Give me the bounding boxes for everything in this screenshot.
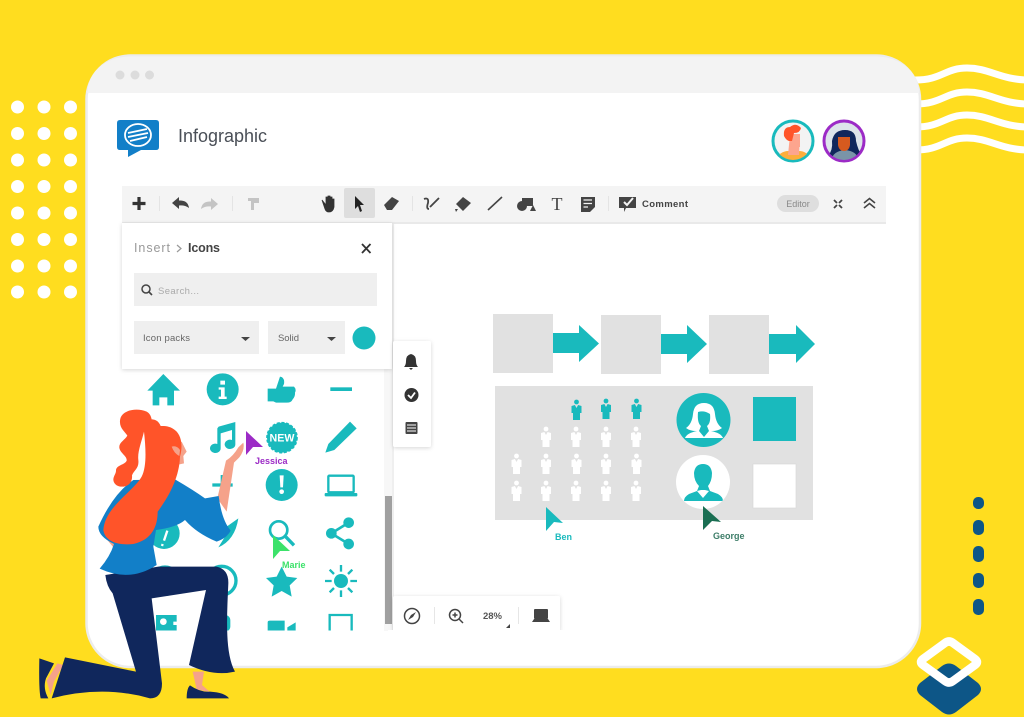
icon: eraser xyxy=(384,197,399,210)
flow boxes xyxy=(493,314,769,374)
icon: line xyxy=(488,197,502,210)
icon: contact xyxy=(156,615,177,632)
cursor: Jessica xyxy=(246,431,289,466)
icon: search xyxy=(270,521,294,545)
ear xyxy=(172,446,180,456)
window title bar xyxy=(88,56,919,93)
white pictogram rows xyxy=(512,427,642,501)
icon: hidden round xyxy=(227,615,230,630)
dropdown: solid xyxy=(268,321,345,354)
icon: home xyxy=(147,374,180,405)
document title: Infographic xyxy=(178,126,267,146)
toolbar xyxy=(122,186,886,224)
icon: undo xyxy=(172,197,189,209)
floating side toolbar xyxy=(393,341,431,447)
icon: bell xyxy=(404,354,418,370)
icon: fill marker xyxy=(455,197,471,212)
icon: zoom xyxy=(450,610,463,623)
logo icon xyxy=(117,120,159,157)
character: kneeling woman xyxy=(39,410,244,698)
teal pictogram row xyxy=(572,399,642,420)
icon: hidden circle left xyxy=(158,565,172,596)
icon: check xyxy=(404,388,418,402)
cursor: George: George xyxy=(713,531,745,541)
people chart panel xyxy=(495,386,813,520)
raised arm xyxy=(217,443,244,512)
white square xyxy=(753,464,796,508)
icon: redo xyxy=(201,198,218,210)
dropdown: icon packs: Icon packs xyxy=(143,333,190,344)
icon: hidden circles xyxy=(207,566,236,595)
icon: info xyxy=(207,373,239,405)
icon: shapes xyxy=(517,198,536,211)
lower diamond xyxy=(917,664,981,714)
hair xyxy=(103,410,182,544)
wave decoration xyxy=(915,68,1024,150)
icon: frame xyxy=(330,615,352,632)
editor pill: Editor xyxy=(786,199,810,209)
brand mark xyxy=(917,642,981,714)
icon: text T: T xyxy=(552,194,562,214)
icon: close xyxy=(362,244,370,253)
woman avatar circle xyxy=(676,393,730,447)
bottom status bar xyxy=(388,596,568,640)
search box xyxy=(134,273,377,306)
browser window xyxy=(86,56,920,667)
colour swatch xyxy=(352,326,376,350)
icon: sun xyxy=(325,565,357,597)
dropdown: solid: Solid xyxy=(278,333,299,344)
icon: comment xyxy=(619,197,636,212)
upper diamond outline xyxy=(921,642,977,682)
editor pill xyxy=(777,195,819,212)
icon: hand xyxy=(322,196,334,212)
icon: pencil xyxy=(325,422,357,453)
panel heading: Icons xyxy=(188,241,220,255)
icon: video xyxy=(268,621,296,632)
icon: share xyxy=(326,517,354,549)
insert panel xyxy=(122,223,392,369)
icon: thumbs up xyxy=(268,377,296,403)
label: comment: Comment xyxy=(642,199,689,210)
flow arrows xyxy=(553,325,815,363)
avatar: man xyxy=(773,121,813,162)
zoom level: 28% xyxy=(483,611,503,622)
icon: expand xyxy=(834,200,842,208)
teal square xyxy=(753,397,796,441)
search box: Search... xyxy=(158,286,199,297)
icon: new badge xyxy=(267,423,297,453)
breadcrumb: Insert xyxy=(134,241,171,255)
zoom caret xyxy=(506,624,510,628)
back foot xyxy=(39,658,63,698)
breadcrumb separator xyxy=(177,245,181,252)
face xyxy=(173,442,187,465)
vertical dashes decoration xyxy=(973,497,984,615)
icon: laptop xyxy=(325,476,357,496)
icon: pen squiggle xyxy=(424,198,439,209)
icon: note xyxy=(581,197,595,212)
icon: plus xyxy=(132,197,146,210)
hand behind back xyxy=(106,538,116,547)
cursor: George xyxy=(703,506,745,541)
cursor: Ben xyxy=(546,507,572,542)
flow diagram xyxy=(493,314,815,374)
icon: new badge: NEW xyxy=(270,433,295,445)
icon: music xyxy=(210,422,235,453)
icon: help hidden xyxy=(154,524,180,549)
icon: star xyxy=(266,567,297,597)
icon: divider xyxy=(212,475,233,487)
icon list xyxy=(147,373,357,632)
man avatar circle xyxy=(676,455,730,509)
trousers xyxy=(52,567,235,698)
window control dots xyxy=(116,70,154,80)
selected tool xyxy=(344,188,375,218)
icon: pointer xyxy=(355,196,364,212)
icon: rocket hidden xyxy=(218,518,238,547)
cursor: Marie xyxy=(273,535,306,570)
icon: compass xyxy=(404,608,420,624)
dot grid decoration xyxy=(11,100,77,298)
icon: collapse xyxy=(864,198,875,208)
icon: laptop xyxy=(532,609,550,622)
icon: alert xyxy=(266,469,298,501)
cursor: Ben: Ben xyxy=(555,532,572,542)
cursor: Jessica: Jessica xyxy=(255,456,289,466)
front foot xyxy=(187,672,229,698)
dropdown: icon packs xyxy=(134,321,259,354)
icon: list xyxy=(406,422,418,434)
icon: dash xyxy=(330,387,352,391)
panel divider line xyxy=(392,224,394,632)
blouse xyxy=(98,479,231,575)
cursor: Marie: Marie xyxy=(282,560,306,570)
icon: paint roller xyxy=(248,198,259,210)
avatar: woman xyxy=(824,121,864,162)
scrollbar xyxy=(384,369,392,631)
